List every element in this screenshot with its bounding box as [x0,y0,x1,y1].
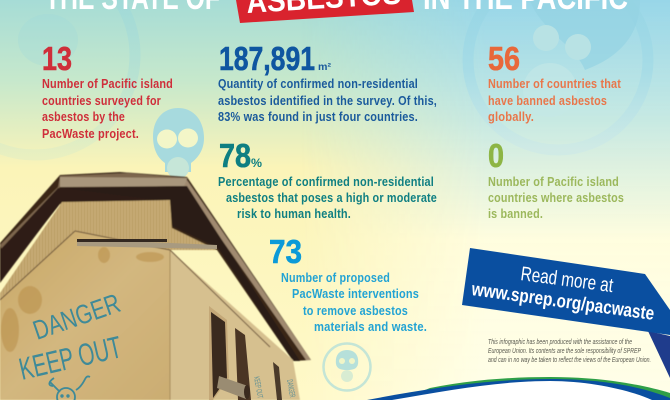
stat: 78 percent: asbestos that poses a high or moderate [226,190,437,205]
stat: 187,891 square metres: m² [318,62,332,73]
pipe on wall [77,239,217,249]
watermark: large gas mask circle, right [468,0,648,150]
stat: 13 surveyed: Number of Pacific island [42,76,173,91]
stat: 13 surveyed: 13 [42,40,72,77]
banner: read more: Read more at [519,263,615,297]
stat: 56 countries banned: 56 [488,40,520,77]
stat: 73 interventions [269,233,427,334]
stat: 56 countries banned: Number of countries that [488,76,621,91]
vent pipe [217,376,250,399]
window 2 [235,328,251,400]
stat: 73 interventions: materials and waste. [314,319,427,334]
stat: 73 interventions: to remove asbestos [303,303,408,318]
title [45,0,628,16]
graffiti: side wall [252,376,297,399]
stat: 0 Pacific bans: is banned. [488,206,543,221]
stat: 0 Pacific bans [488,137,624,221]
watermark: large gas mask circle, left [0,0,135,155]
stat: 56 countries banned [488,40,621,124]
graffiti: skull and crossbones [49,376,90,400]
graffiti: danger: DANGER [29,288,124,346]
window 3 [273,362,282,400]
graffiti: keep out: KEEP OUT [16,329,125,387]
stat: 73 interventions: 73 [269,233,302,270]
stat: 78 percent: 78 [219,137,251,174]
stat: 78 percent: Percentage of confirmed non-residential [218,174,434,189]
banner: read more [462,248,670,378]
window 1 [209,306,229,400]
stat: 78 percent [218,137,437,221]
stat: 187,891 square metres: Quantity of confirmed non-residential [218,76,418,91]
stat: 78 percent: risk to human health. [237,206,351,221]
stat: 187,891 square metres: 83% was found in just four countries. [218,109,418,124]
stat: 13 surveyed: asbestos by the [42,109,125,124]
building structure [0,172,311,400]
stat: 187,891 square metres [218,40,437,124]
stat: 73 interventions: Number of proposed [281,270,390,285]
stat: 0 Pacific bans: 0 [488,137,504,174]
stat: 73 interventions: PacWaste interventions [292,286,419,301]
icon: gas mask skull, middle [153,108,204,179]
stat: 13 surveyed: countries surveyed for [42,93,161,108]
disclaimer [488,337,651,364]
stat: 56 countries banned: have banned asbestos [488,93,607,108]
stat: 187,891 square metres: 187,891 [219,40,315,77]
stat: 56 countries banned: globally. [488,109,534,124]
stat: 187,891 square metres: asbestos identified in the survey. Of this, [218,93,437,108]
icon: small gas mask circle [324,344,370,390]
stat: 78 percent: % [251,156,262,170]
stat: 13 surveyed [42,40,173,141]
photo: derelict building [0,172,311,400]
footer swoosh [367,377,670,400]
stat: 0 Pacific bans: countries where asbestos [488,190,624,205]
stat: 13 surveyed: PacWaste project. [42,126,139,141]
stat: 0 Pacific bans: Number of Pacific island [488,174,619,189]
